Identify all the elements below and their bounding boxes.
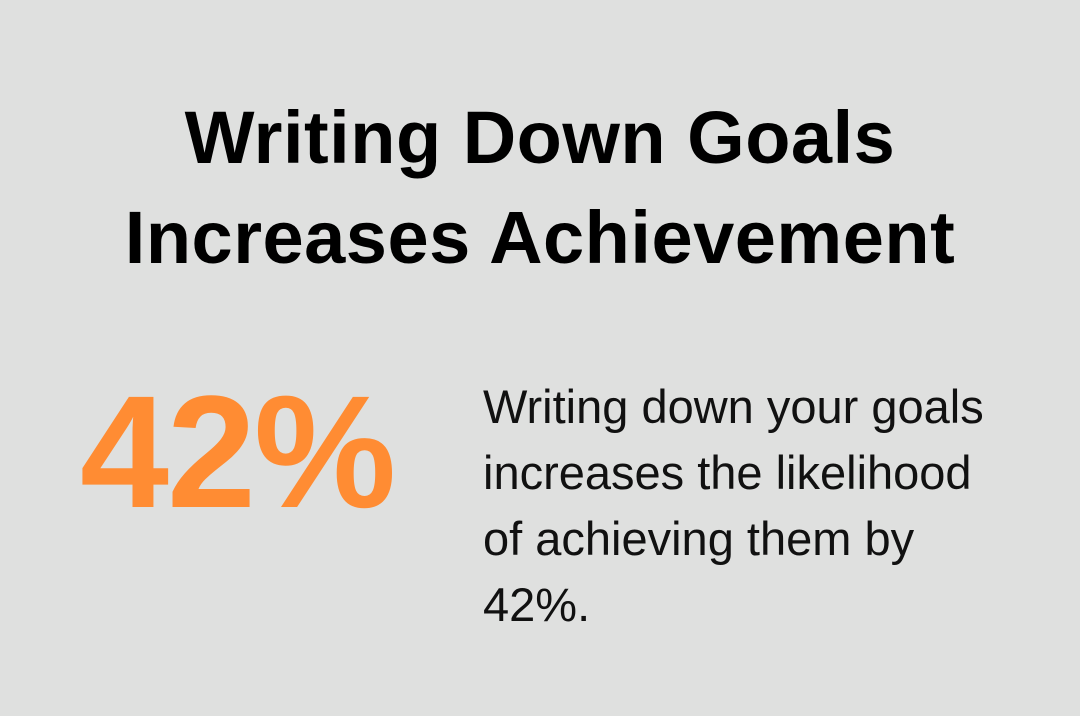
- description text: [483, 380, 984, 631]
- description text: of achieving them by: [483, 512, 914, 565]
- description text: increases the likelihood: [483, 446, 972, 499]
- stat: 42%: 42%: [80, 362, 394, 541]
- description text: 42%.: [483, 578, 590, 631]
- title: Writing Down Goals: [185, 96, 895, 179]
- title: [125, 96, 955, 279]
- description text: Writing down your goals: [483, 380, 984, 433]
- title: Increases Achievement: [125, 196, 955, 279]
